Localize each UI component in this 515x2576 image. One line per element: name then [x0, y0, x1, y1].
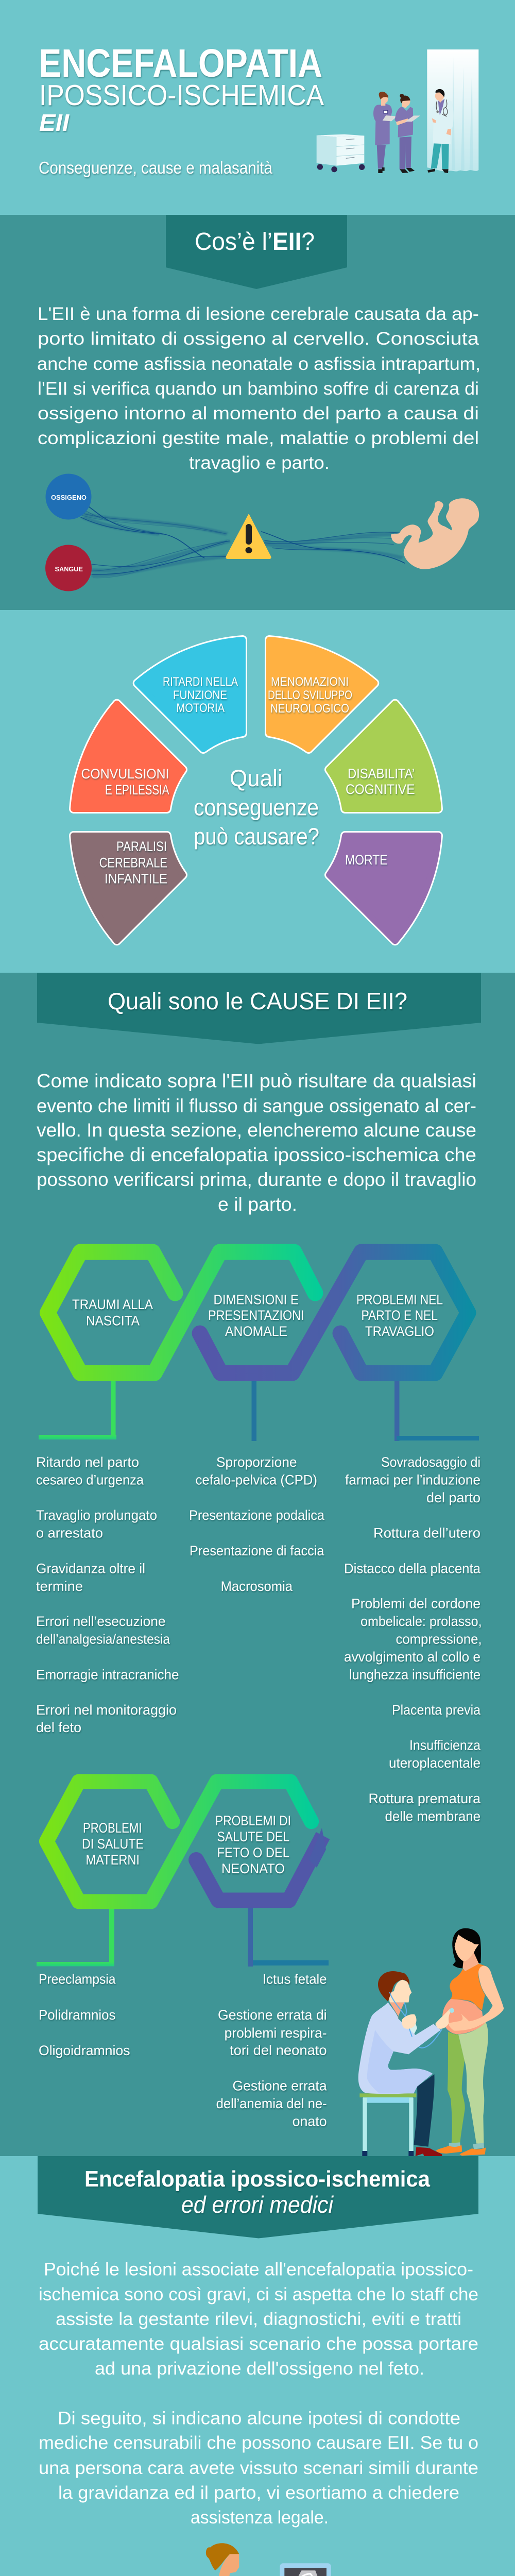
list: parto e travaglio: del parto — [426, 1490, 480, 1505]
flow lines — [80, 506, 405, 578]
segment: paralisi cerebrale infantile: PARALISI — [116, 839, 167, 854]
list: dimensioni e presentazioni: Presentazione podalica — [189, 1507, 325, 1523]
list: salute fetale: Ictus fetale — [263, 1972, 327, 1987]
paragraph: cause: e il parto. — [218, 1194, 297, 1215]
list: salute materna: Polidramnios — [39, 2007, 115, 2023]
paragraph: definizione EII: travaglio e parto. — [189, 453, 330, 473]
connector: colonna 1 — [39, 1381, 116, 1439]
paragraph: errori medici: ischemica sono così gravi, ci si aspetta che lo staff che — [39, 2284, 478, 2304]
segment: morte — [329, 836, 438, 941]
paragraph: ipotesi di condotte: la gravidanza ed il parto, vi esortiamo a chiedere — [58, 2483, 459, 2503]
paragraph: ipotesi di condotte: mediche censurabili che possono causare EII. Se tu o — [39, 2433, 478, 2453]
paragraph: definizione EII: complicazioni gestite male, malattie o problemi del — [38, 428, 479, 448]
paragraph: errori medici — [39, 2260, 478, 2379]
label: problemi di salute del feto o del neonato — [215, 1813, 291, 1876]
list: parto e travaglio: Placenta previa — [392, 1702, 481, 1718]
segment: ritardi nella funzione motoria — [138, 640, 243, 749]
icon: ossigeno: OSSIGENO — [51, 494, 87, 501]
list: traumi alla nascita: o arrestato — [36, 1526, 103, 1541]
wheel centre question: Quali — [230, 765, 282, 791]
label: problemi nel parto e nel travaglio: TRAVAGLIO — [365, 1324, 434, 1339]
list: parto e travaglio: compressione, — [396, 1632, 482, 1647]
paragraph: cause: specifiche di encefalopatia ipossico-ischemica che — [37, 1144, 476, 1165]
title: EII — [39, 109, 70, 136]
segment: paralisi cerebrale infantile: CEREBRALE — [99, 855, 167, 870]
list: salute materna: Preeclampsia — [39, 1972, 116, 1987]
list: salute materna: Oligoidramnios — [39, 2043, 130, 2058]
label: problemi di salute del feto o del neonato: PROBLEMI DI — [215, 1813, 291, 1828]
list: parto e travaglio: lunghezza insufficiente — [349, 1667, 480, 1683]
wheel centre question — [194, 765, 319, 850]
paragraph: cause: evento che limiti il flusso di sangue ossigenato al cer- — [37, 1095, 476, 1116]
icon: ossigeno — [45, 474, 92, 519]
label: problemi nel parto e nel travaglio: PROBLEMI NEL — [356, 1292, 443, 1308]
segment: ritardi nella funzione motoria: FUNZIONE — [173, 688, 227, 702]
diagram: ossigeno e sangue verso il feto — [45, 474, 479, 591]
label: problemi di salute materni — [82, 1820, 144, 1868]
label: problemi di salute del feto o del neonato: FETO O DEL — [217, 1845, 289, 1860]
paragraph: errori medici: Poiché le lesioni associate all'encefalopatia ipossico- — [44, 2260, 473, 2280]
list: traumi alla nascita: Emorragie intracraniche — [36, 1667, 179, 1683]
list: parto e travaglio: Rottura dell’utero — [373, 1526, 480, 1541]
icon: fetus — [391, 498, 479, 569]
paragraph: errori medici: accuratamente qualsiasi scenario che possa portare — [39, 2334, 478, 2354]
list: salute fetale: Gestione errata — [233, 2078, 328, 2094]
banner heading: errori medici — [38, 2156, 478, 2238]
paragraph: definizione EII: porto limitato di ossigeno al cervello. Conosciuta — [38, 329, 479, 349]
banner heading: errori medici: Encefalopatia ipossico-ischemica — [84, 2166, 430, 2192]
paragraph: ipotesi di condotte: Di seguito, si indicano alcune ipotesi di condotte — [58, 2408, 460, 2429]
list: parto e travaglio: Rottura prematura — [369, 1791, 481, 1806]
list: parto e travaglio: Problemi del cordone — [351, 1596, 480, 1612]
label: problemi di salute materni: PROBLEMI — [83, 1820, 142, 1836]
wheel centre question: può causare? — [194, 823, 319, 850]
list: salute fetale — [216, 1972, 328, 2129]
list: dimensioni e presentazioni: Sproporzione — [216, 1454, 297, 1470]
list: parto e travaglio: Sovradosaggio di — [381, 1454, 480, 1470]
connector: salute materna — [37, 1909, 114, 1966]
list: parto e travaglio: avvolgimento al collo e — [344, 1649, 480, 1665]
paragraph: ipotesi di condotte: una persona cara avete vissuto scenari simili durante — [39, 2458, 478, 2478]
list: traumi alla nascita — [36, 1454, 179, 1735]
list: dimensioni e presentazioni: Macrosomia — [221, 1579, 293, 1594]
list: traumi alla nascita: termine — [36, 1579, 83, 1594]
paragraph: cause: Come indicato sopra l'EII può risultare da qualsiasi — [37, 1071, 476, 1092]
list: salute fetale: onato — [293, 2113, 327, 2129]
paragraph: ipotesi di condotte — [39, 2408, 478, 2528]
illustration: ecografia — [130, 2543, 384, 2576]
list: salute fetale: tori del neonato — [230, 2043, 327, 2058]
paragraph: definizione EII: l'EII si verifica quando un bambino soffre di carenza di — [38, 379, 479, 399]
connector: colonna 3 — [394, 1381, 479, 1441]
paragraph: definizione EII — [37, 304, 480, 473]
paragraph: definizione EII: L'EII è una forma di lesione cerebrale causata da ap- — [38, 304, 479, 324]
hexagon chain: salute materna e fetale — [37, 1782, 329, 1967]
paragraph: definizione EII: ossigeno intorno al momento del parto a causa di — [38, 403, 479, 423]
list: salute fetale: Gestione errata di — [218, 2007, 327, 2023]
segment: morte: MORTE — [345, 852, 387, 868]
segment: paralisi cerebrale infantile: INFANTILE — [105, 871, 167, 887]
segment: disabilità cognitive — [329, 704, 438, 809]
illustration: medico visita donna incinta — [358, 1928, 504, 2156]
list: traumi alla nascita: Errori nell’esecuzione — [36, 1614, 166, 1629]
paragraph: errori medici: assiste la gestante rilevi, diagnostichi, eviti e tratti — [56, 2309, 461, 2329]
list: parto e travaglio: uteroplacentale — [389, 1755, 480, 1771]
list: traumi alla nascita: Errori nel monitoraggio — [36, 1702, 177, 1718]
connector: colonna 2 — [251, 1381, 256, 1441]
label: problemi di salute materni: DI SALUTE — [82, 1836, 144, 1852]
segment: menomazioni dello sviluppo neurologico: NEUROLOGICO — [270, 702, 349, 716]
label: traumi alla nascita — [72, 1297, 153, 1328]
banner heading: cause di EII — [37, 973, 481, 1044]
label: problemi nel parto e nel travaglio: PARTO E NEL — [362, 1308, 438, 1323]
list: salute materna — [39, 1972, 130, 2058]
paragraph: definizione EII: anche come asfissia neonatale o asfissia intrapartum, — [37, 354, 480, 374]
paragraph: cause — [37, 1071, 476, 1215]
list: traumi alla nascita: dell’analgesia/anestesia — [36, 1632, 170, 1647]
segment: ritardi nella funzione motoria: RITARDI NELLA — [163, 675, 238, 689]
list: salute fetale: problemi respira- — [225, 2025, 327, 2041]
banner heading: cause di EII: Quali sono le CAUSE DI EII? — [108, 988, 407, 1014]
segment: menomazioni dello sviluppo neurologico: DELLO SVILUPPO — [268, 688, 352, 702]
title: IPOSSICO-ISCHEMICA — [39, 79, 324, 112]
segment: menomazioni dello sviluppo neurologico: MENOMAZIONI — [271, 675, 349, 689]
list: parto e travaglio: ombelicale: prolasso, — [360, 1614, 482, 1629]
banner heading: Cos'è l'EII?: Cos’è l’EII? — [195, 228, 315, 256]
paragraph: cause: possono verificarsi prima, durante e dopo il travaglio — [37, 1169, 476, 1190]
segment: ritardi nella funzione motoria: MOTORIA — [176, 701, 225, 715]
list: traumi alla nascita: del feto — [36, 1720, 81, 1735]
label: problemi di salute materni: MATERNI — [85, 1852, 140, 1868]
icon: sangue — [45, 545, 92, 591]
segment: convulsioni e epilessia: E EPILESSIA — [105, 782, 169, 798]
list: dimensioni e presentazioni: cefalo-pelvica (CPD) — [196, 1472, 317, 1488]
segment: disabilità cognitive: DISABILITA’ — [348, 766, 415, 782]
icon: warning triangle — [226, 515, 271, 558]
icon: sangue: SANGUE — [55, 565, 83, 573]
list: dimensioni e presentazioni: Presentazione di faccia — [190, 1543, 324, 1558]
label: problemi di salute del feto o del neonato: NEONATO — [221, 1861, 285, 1876]
background band: Cos'è section — [0, 215, 515, 610]
illustration: medical staff with cabinet and curtain — [317, 49, 478, 173]
list: parto e travaglio: Insufficienza — [409, 1738, 481, 1753]
label: problemi di salute del feto o del neonato: SALUTE DEL — [217, 1829, 289, 1844]
label: traumi alla nascita: NASCITA — [86, 1313, 140, 1328]
list: parto e travaglio: delle membrane — [385, 1808, 480, 1824]
title: ENCEFALOPATIA — [39, 41, 322, 86]
segment: disabilità cognitive: COGNITIVE — [346, 782, 415, 797]
background band: cause section — [0, 973, 515, 2156]
label: traumi alla nascita: TRAUMI ALLA — [72, 1297, 153, 1312]
label: dimensioni e presentazioni anomale — [208, 1292, 304, 1339]
label: dimensioni e presentazioni anomale: DIMENSIONI E — [213, 1292, 299, 1308]
list: traumi alla nascita: Travaglio prolungato — [36, 1507, 157, 1523]
list: traumi alla nascita: Gravidanza oltre il — [36, 1561, 145, 1576]
paragraph: errori medici: ad una privazione dell'ossigeno nel feto. — [95, 2359, 424, 2379]
list: parto e travaglio — [344, 1454, 482, 1824]
label: dimensioni e presentazioni anomale: PRESENTAZIONI — [208, 1308, 304, 1323]
segment: convulsioni e epilessia: CONVULSIONI — [81, 766, 169, 782]
list: traumi alla nascita: Ritardo nel parto — [36, 1454, 139, 1470]
segment: menomazioni dello sviluppo neurologico — [268, 640, 374, 749]
hexagon chain: tre categorie di cause — [39, 1252, 479, 1441]
label: dimensioni e presentazioni anomale: ANOMALE — [225, 1324, 287, 1339]
label: problemi nel parto e nel travaglio — [356, 1292, 443, 1339]
list: salute fetale: dell’anemia del ne- — [216, 2096, 327, 2111]
paragraph: cause: vello. In questa sezione, elencheremo alcune cause — [37, 1120, 476, 1141]
connector: salute fetale — [248, 1908, 329, 1967]
banner heading: errori medici: ed errori medici — [181, 2191, 334, 2218]
wheel centre question: conseguenze — [194, 794, 319, 821]
list: traumi alla nascita: cesareo d’urgenza — [36, 1472, 144, 1488]
list: parto e travaglio: farmaci per l’induzione — [345, 1472, 480, 1488]
segment: convulsioni e epilessia — [74, 704, 183, 809]
segment: paralisi cerebrale infantile — [74, 836, 183, 941]
list: parto e travaglio: Distacco della placenta — [344, 1561, 481, 1576]
banner heading: Cos'è l'EII? — [166, 215, 347, 289]
title — [39, 41, 324, 136]
list: dimensioni e presentazioni — [189, 1454, 325, 1594]
wheel: conseguenze — [74, 640, 438, 941]
subtitle: Conseguenze, cause e malasanità — [39, 158, 273, 177]
paragraph: ipotesi di condotte: assistenza legale. — [191, 2507, 329, 2528]
